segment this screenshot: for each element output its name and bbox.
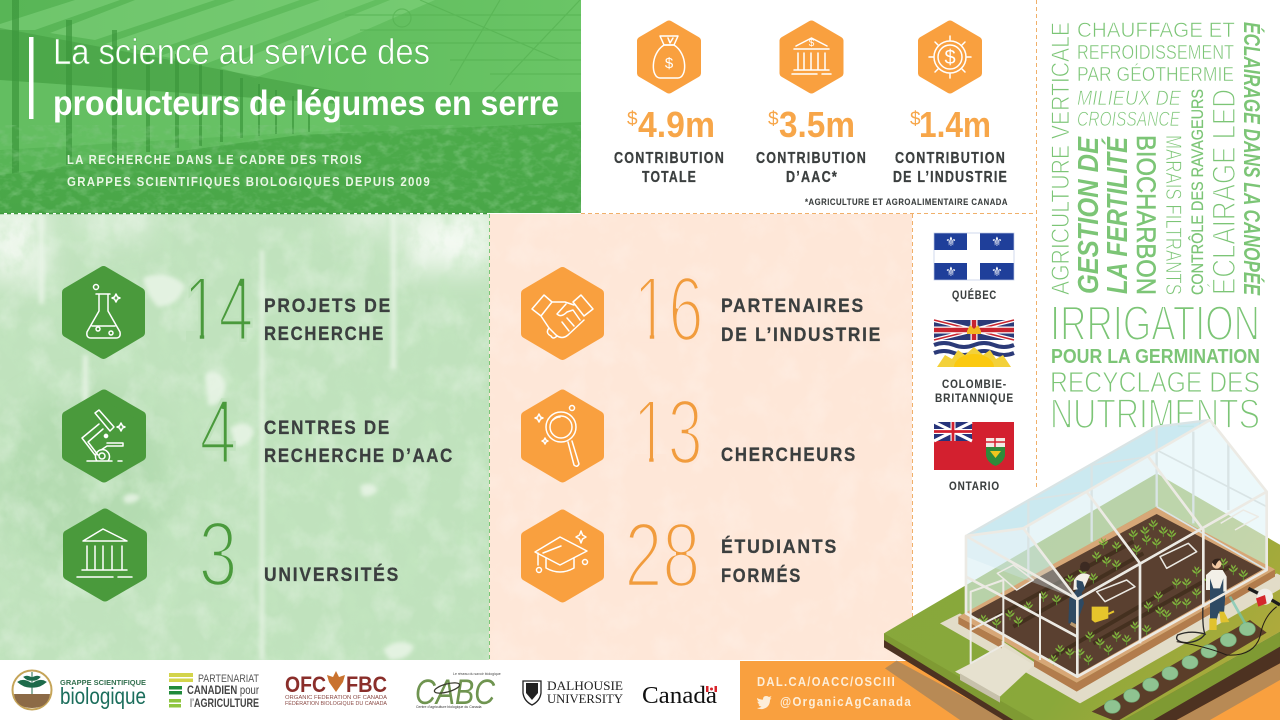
funding: AAFC contribution: $ bbox=[768, 109, 779, 130]
logo: CABC: Le réseau du savoir biologique bbox=[453, 672, 501, 676]
icon: bank with dollar bbox=[792, 38, 831, 74]
female worker with watering can bbox=[1068, 562, 1114, 627]
funding: AAFC contribution: 3.5m bbox=[779, 104, 855, 145]
stat: 28 students trained bbox=[526, 505, 838, 607]
word cloud: research topics: POUR LA GERMINATION bbox=[1051, 346, 1260, 368]
flag: Quebec bbox=[933, 232, 1015, 302]
funding: AAFC contribution: CONTRIBUTION bbox=[756, 150, 867, 167]
flag: British Columbia bbox=[934, 320, 1014, 405]
panel: green stats background photo bbox=[0, 205, 495, 660]
number foot mask bbox=[186, 331, 217, 342]
icon: money bag bbox=[653, 36, 685, 78]
number foot mask bbox=[636, 331, 667, 342]
icon: university building bbox=[77, 529, 132, 577]
word cloud: research topics: PAR GÉOTHERMIE bbox=[1077, 63, 1234, 86]
icon: gear with dollar: $ bbox=[944, 47, 956, 69]
logo: Dalhousie University: DALHOUSIE bbox=[547, 679, 623, 693]
title block: La science au service des bbox=[53, 31, 430, 72]
logo: Partenariat canadien pour l'agriculture bbox=[169, 673, 259, 710]
icon: bank with dollar: $ bbox=[809, 38, 815, 49]
funding: industry contribution: DE L’INDUSTRIE bbox=[893, 169, 1008, 186]
flag: Quebec: ⚜ bbox=[991, 264, 1003, 279]
label: Colombie-Britannique: BRITANNIQUE bbox=[935, 393, 1014, 405]
stat: 14 research projects bbox=[67, 257, 392, 360]
dashed dividers bbox=[0, 0, 1036, 660]
stat: 28 students trained: ÉTUDIANTS bbox=[721, 535, 838, 558]
logo: Dalhousie University bbox=[523, 679, 623, 706]
word cloud: research topics: CHAUFFAGE ET bbox=[1077, 19, 1235, 42]
subtitle: LA RECHERCHE DANS LE CADRE DES TROIS bbox=[67, 152, 363, 167]
word cloud: research topics: CROISSANCE bbox=[1077, 108, 1181, 131]
funding: total contribution bbox=[614, 25, 725, 186]
word cloud: research topics: BIOCHARBON bbox=[1131, 135, 1161, 295]
subtitle: GRAPPES SCIENTIFIQUES BIOLOGIQUES DEPUIS 2009 bbox=[67, 174, 431, 189]
logo: Partenariat canadien pour l'agriculture: l’AGRICULTURE bbox=[190, 696, 259, 710]
icon: handshake bbox=[532, 295, 593, 338]
stat: 16 industry partners bbox=[526, 257, 882, 360]
word cloud: research topics: CONTRÔLE DES RAVAGEURS bbox=[1188, 89, 1207, 295]
logo: Dalhousie University: UNIVERSITY bbox=[547, 692, 623, 706]
lawn surface bbox=[884, 473, 1280, 720]
contact: web address and Twitter handle: @OrganicAgCanada bbox=[780, 694, 912, 709]
funding: industry contribution: 1.4m bbox=[919, 104, 991, 145]
cabbage bed bbox=[1092, 620, 1267, 720]
ground shadow bbox=[885, 661, 1280, 720]
soil block side bbox=[884, 632, 1280, 720]
icon: magnifying glass bbox=[535, 406, 579, 466]
stat: 3 universities bbox=[68, 503, 400, 606]
logo: OFC FBC: OFC bbox=[285, 672, 326, 697]
icon: money bag: $ bbox=[665, 55, 674, 72]
logo: OFC FBC: ORGANIC FEDERATION OF CANADA bbox=[285, 695, 388, 701]
label: Colombie-Britannique: COLOMBIE- bbox=[942, 379, 1007, 391]
number foot mask bbox=[635, 454, 666, 465]
word cloud: research topics: LA FERTILITÉ bbox=[1101, 136, 1134, 294]
stat: 13 researchers: 13 bbox=[633, 380, 703, 483]
funding: AAFC contribution bbox=[756, 25, 867, 186]
logo: Grappe scientifique biologique bbox=[12, 670, 146, 710]
word cloud: research topics: GESTION DE bbox=[1073, 136, 1105, 294]
logo: Partenariat canadien pour l'agriculture: PARTENARIAT bbox=[198, 673, 259, 685]
stat: 28 students trained: 28 bbox=[624, 505, 700, 607]
stat: 4 AAFC research centres bbox=[67, 380, 454, 483]
stat: 3 universities: 3 bbox=[198, 503, 237, 606]
label: Québec: QUÉBEC bbox=[952, 289, 997, 302]
panel: orange stats background photo bbox=[489, 214, 912, 660]
greenhouse foundation and floor bbox=[958, 507, 1275, 692]
icon: microscope bbox=[82, 410, 125, 461]
paved path bbox=[940, 573, 1280, 703]
stat: 16 industry partners: PARTENAIRES bbox=[721, 295, 865, 317]
flag: Quebec: ⚜ bbox=[991, 234, 1003, 249]
stat: 28 students trained: FORMÉS bbox=[721, 564, 802, 587]
footer bar bbox=[0, 660, 1280, 720]
icon: Twitter bird bbox=[757, 696, 772, 709]
funding: total contribution: TOTALE bbox=[642, 169, 697, 186]
left gable glass bbox=[966, 528, 1077, 599]
stat: 4 AAFC research centres: RECHERCHE D’AAC bbox=[264, 445, 454, 467]
label: Ontario: ONTARIO bbox=[949, 481, 1000, 493]
word cloud: research topics: ÉCLAIRAGE LED bbox=[1206, 89, 1242, 295]
rear glass bbox=[966, 420, 1267, 613]
funding: AAFC contribution: D’AAC* bbox=[786, 169, 838, 186]
label: Colombie-Britannique bbox=[935, 379, 1014, 405]
funding: total contribution: 4.9m bbox=[638, 104, 715, 145]
icon: flask bbox=[87, 284, 120, 338]
stat: 4 AAFC research centres: CENTRES DE bbox=[264, 417, 391, 439]
stat: 4 AAFC research centres: 4 bbox=[200, 380, 236, 483]
funding: total contribution: CONTRIBUTION bbox=[614, 150, 725, 167]
icon: graduation cap bbox=[535, 531, 588, 572]
flag: Quebec: ⚜ bbox=[945, 234, 957, 249]
stat: 13 researchers bbox=[526, 380, 857, 483]
logo: CABC: Centre d'agriculture biologique du Canada bbox=[416, 705, 482, 709]
funding: industry contribution: CONTRIBUTION bbox=[895, 150, 1006, 167]
crops bbox=[979, 519, 1248, 665]
funding: total contribution: $ bbox=[627, 109, 638, 130]
word cloud: research topics: REFROIDISSEMENT bbox=[1077, 41, 1234, 64]
logo: CABC: CABC bbox=[415, 673, 496, 712]
stat: 16 industry partners: 16 bbox=[634, 257, 703, 360]
footnote: *AGRICULTURE ET AGROALIMENTAIRE CANADA bbox=[805, 197, 1008, 207]
stat: 13 researchers: CHERCHEURS bbox=[721, 444, 857, 466]
word cloud: research topics: MILIEUX DE bbox=[1077, 87, 1182, 110]
title block bbox=[29, 31, 559, 123]
male worker with hose bbox=[1177, 559, 1245, 643]
word cloud: research topics: ÉCLAIRAGE DANS LA CANOPÉE bbox=[1239, 22, 1266, 295]
stat: 3 universities: UNIVERSITÉS bbox=[264, 563, 400, 586]
subtitle bbox=[67, 152, 431, 189]
lawn lip bbox=[884, 632, 1280, 720]
logo: Canada wordmark: Canada bbox=[642, 683, 717, 709]
contact: web address and Twitter handle bbox=[757, 674, 912, 709]
logo: OFC FBC: FBC bbox=[346, 672, 387, 697]
panel: green title banner bbox=[0, 0, 581, 213]
stat: 14 research projects: 14 bbox=[184, 257, 253, 360]
stat: 14 research projects: RECHERCHE bbox=[264, 323, 385, 345]
logo: OFC FBC bbox=[285, 671, 388, 707]
title block: producteurs de légumes en serre bbox=[53, 84, 559, 123]
word cloud: research topics: MARAIS FILTRANTS bbox=[1161, 135, 1186, 295]
logo: Grappe scientifique biologique: biologique bbox=[60, 683, 146, 709]
flag: Quebec: ⚜ bbox=[945, 264, 957, 279]
funding: industry contribution bbox=[893, 25, 1008, 186]
flag: Ontario bbox=[934, 422, 1014, 493]
hose and sprinkler valve bbox=[1177, 588, 1280, 655]
illustration: isometric greenhouse bbox=[884, 420, 1280, 720]
greenhouse frame bbox=[966, 420, 1267, 677]
contact: web address and Twitter handle: DAL.CA/OACC/OSCIII bbox=[757, 674, 896, 689]
logo: Grappe scientifique biologique: GRAPPE SCIENTIFIQUE bbox=[60, 678, 146, 687]
door step bbox=[955, 647, 1034, 703]
stat: 16 industry partners: DE L’INDUSTRIE bbox=[721, 324, 882, 346]
stat: 14 research projects: PROJETS DE bbox=[264, 295, 392, 317]
funding: industry contribution: $ bbox=[910, 109, 921, 130]
logo: OFC FBC: FÉDÉRATION BIOLOGIQUE DU CANADA bbox=[285, 700, 388, 707]
word cloud: research topics bbox=[1047, 19, 1266, 437]
logo: Partenariat canadien pour l'agriculture: CANADIEN pour bbox=[187, 683, 259, 697]
icon: gear with dollar bbox=[929, 36, 971, 78]
